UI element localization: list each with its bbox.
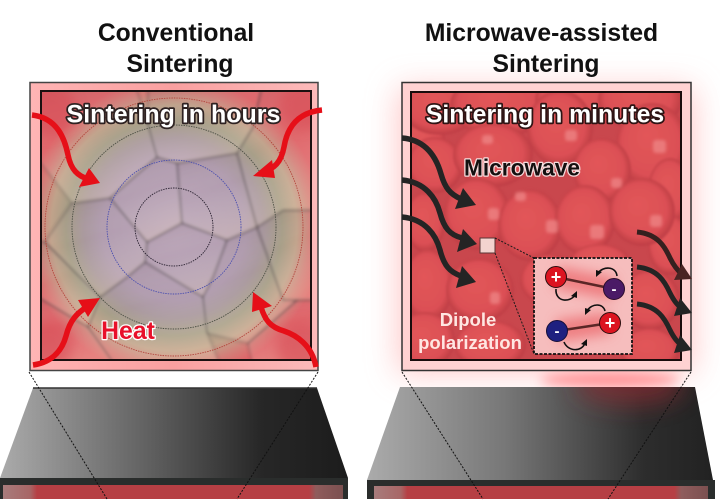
label: dipole polarization: Dipole bbox=[440, 309, 496, 330]
grain structure bbox=[42, 92, 310, 359]
dipole: top: - bbox=[612, 281, 616, 298]
corner vignette bbox=[42, 92, 310, 359]
panel: conventional sintering bbox=[24, 81, 329, 374]
zoom connector lines bbox=[495, 238, 534, 354]
label: dipole polarization: polarization bbox=[418, 332, 522, 353]
furnace: microwave bbox=[367, 387, 715, 499]
zoom projection lines: conventional bbox=[29, 372, 318, 499]
title: conventional sintering: Conventional bbox=[98, 20, 254, 47]
arrow: microwave 2 bbox=[402, 180, 477, 252]
zoom source square bbox=[480, 238, 495, 253]
arrows: outgoing microwave bbox=[637, 232, 692, 353]
title: microwave-assisted sintering: Sintering bbox=[493, 51, 599, 78]
panel frame bbox=[30, 82, 318, 370]
arrow: microwave 1 bbox=[402, 138, 476, 209]
concentric isotherm circles bbox=[45, 98, 303, 356]
label: sintering in minutes: Sintering in minutes bbox=[426, 102, 664, 128]
inset: dipole polarization bbox=[534, 258, 632, 354]
title: conventional sintering: Sintering bbox=[127, 51, 233, 78]
dipole: top bbox=[546, 266, 624, 300]
arrow: heat bottom-right bbox=[252, 292, 316, 367]
arrow: microwave 3 bbox=[402, 217, 476, 288]
arrow: heat bottom-left bbox=[33, 298, 100, 365]
grain structure bbox=[412, 93, 680, 359]
label: sintering in hours: Sintering in hours bbox=[67, 100, 280, 128]
furnace: conventional bbox=[0, 388, 348, 499]
arrow: heat top-left bbox=[32, 115, 100, 187]
arrow: heat top-right bbox=[253, 110, 322, 178]
label: heat: Heat bbox=[101, 318, 155, 345]
arrow: out 3 bbox=[637, 304, 692, 353]
panel: microwave-assisted sintering bbox=[395, 70, 692, 372]
red glow around microwave panel bbox=[398, 88, 694, 388]
arrows: heat flow bbox=[32, 110, 322, 367]
arrow: out 2 bbox=[637, 267, 692, 316]
dipole: bottom: + bbox=[605, 313, 615, 333]
title: microwave-assisted sintering: Microwave-assisted bbox=[425, 20, 658, 47]
label: microwave: Microwave bbox=[464, 154, 580, 180]
grain highlights bbox=[482, 130, 666, 304]
arrow: out 1 bbox=[637, 232, 692, 280]
arrows: incoming microwave bbox=[402, 138, 477, 288]
dipole: bottom bbox=[546, 305, 620, 350]
dipole: top: + bbox=[551, 267, 561, 287]
dipole: bottom: - bbox=[554, 323, 560, 340]
zoom projection lines: microwave bbox=[402, 372, 691, 499]
panel frame bbox=[402, 82, 691, 370]
